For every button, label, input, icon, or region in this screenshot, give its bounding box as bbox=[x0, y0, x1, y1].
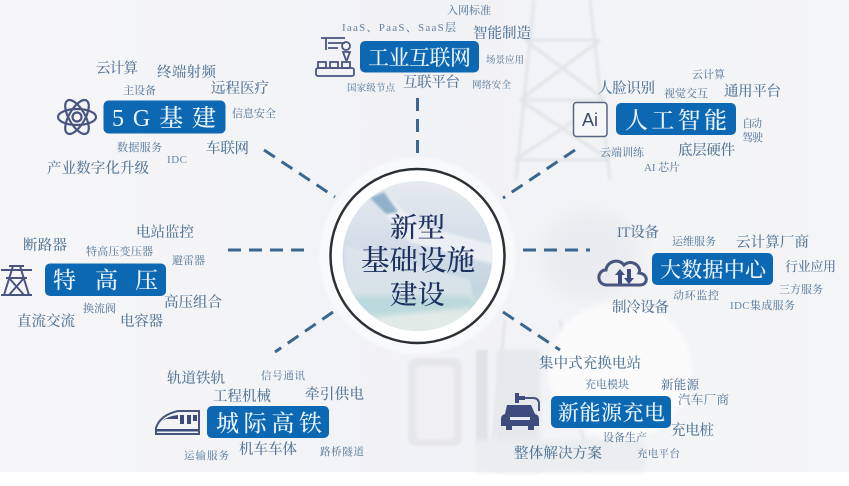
工业互联网 terms: IaaS、PaaS、SaaS层 bbox=[342, 21, 457, 34]
panel: 大数据中心 bbox=[599, 224, 836, 316]
城际高铁 terms bbox=[167, 369, 364, 462]
icon: Ai box: Ai bbox=[582, 110, 598, 130]
5G terms: 云计算 bbox=[96, 60, 138, 77]
panel: 人工智能 bbox=[574, 67, 782, 174]
新能源充电 terms: 整体解决方案 bbox=[514, 444, 602, 462]
新能源充电 terms bbox=[514, 354, 729, 462]
人工智能 terms: 驾驶 bbox=[742, 130, 763, 144]
大数据中心 label: 大数据中心 bbox=[660, 258, 768, 282]
城际高铁 terms: 机车车体 bbox=[239, 441, 298, 458]
工业互联网 terms: 网络安全 bbox=[472, 79, 511, 91]
dashed connectors bbox=[228, 98, 590, 352]
新能源充电 terms: 汽车厂商 bbox=[678, 392, 729, 407]
5G terms: 数据服务 bbox=[117, 140, 162, 154]
icon: cloud bbox=[599, 261, 646, 285]
5G label: 5 G 基 建 bbox=[112, 105, 216, 132]
新能源充电 pill bbox=[551, 396, 671, 428]
特高压 terms: 特高压变压器 bbox=[86, 244, 153, 258]
center title: 新型 bbox=[390, 213, 445, 243]
工业互联网 label: 工业互联网 bbox=[368, 46, 471, 70]
工业互联网 terms: 国家级节点 bbox=[347, 82, 395, 94]
人工智能 terms: 云端训练 bbox=[600, 145, 645, 159]
城际高铁 pill bbox=[207, 406, 329, 438]
人工智能 terms: AI 芯片 bbox=[644, 160, 680, 174]
circle photo: airplane wing bbox=[340, 180, 496, 335]
新能源充电 terms: 新能源 bbox=[661, 377, 699, 392]
特高压 terms bbox=[17, 223, 222, 330]
5G terms: IDC bbox=[167, 154, 187, 166]
panel: 城际高铁 bbox=[155, 369, 364, 462]
人工智能 terms: 通用平台 bbox=[724, 83, 782, 100]
城际高铁 terms: 牵引供电 bbox=[305, 385, 364, 403]
城际高铁 terms: 轨道铁轨 bbox=[167, 369, 226, 387]
人工智能 pill bbox=[616, 103, 736, 135]
5G terms: 信息安全 bbox=[232, 106, 276, 120]
特高压 terms: 断路器 bbox=[23, 237, 68, 254]
大数据中心 terms: IDC集成服务 bbox=[730, 298, 795, 312]
人工智能 terms bbox=[598, 67, 782, 174]
特高压 terms: 直流交流 bbox=[17, 313, 76, 330]
工业互联网 terms bbox=[342, 3, 532, 94]
特高压 terms: 电容器 bbox=[120, 312, 164, 330]
center title: 建设 bbox=[390, 280, 445, 310]
特高压 label: 高 bbox=[95, 268, 118, 293]
新能源充电 terms: 设备生产 bbox=[603, 430, 647, 444]
特高压 terms: 高压组合 bbox=[164, 294, 222, 311]
5G terms: 远程医疗 bbox=[211, 80, 270, 97]
人工智能 terms: 视觉交互 bbox=[664, 86, 708, 100]
5G pill bbox=[104, 100, 226, 134]
panel: 5G bbox=[47, 60, 276, 177]
新能源充电 terms: 充电平台 bbox=[637, 447, 680, 460]
5G terms: 产业数字化升级 bbox=[47, 159, 150, 177]
工业互联网 terms: 入网标准 bbox=[447, 3, 491, 17]
5G terms: 主设备 bbox=[123, 83, 156, 97]
center title: 基础设施 bbox=[361, 245, 475, 277]
新能源充电 terms: 充电桩 bbox=[671, 421, 714, 439]
5G terms: 终端射频 bbox=[157, 63, 216, 81]
icon: transmission tower bbox=[1, 266, 32, 295]
城际高铁 terms: 路桥隧道 bbox=[320, 445, 364, 458]
城际高铁 label: 城际高铁 bbox=[216, 411, 322, 436]
icon: robot arm and conveyor bbox=[316, 38, 354, 76]
特高压 label: 压 bbox=[135, 268, 158, 293]
城际高铁 terms: 信号通讯 bbox=[261, 369, 306, 382]
人工智能 terms: 底层硬件 bbox=[678, 141, 736, 159]
icon: Ai box bbox=[574, 102, 607, 136]
icon: charging car bbox=[501, 393, 539, 430]
central circle bbox=[329, 161, 506, 344]
大数据中心 terms: 制冷设备 bbox=[612, 298, 670, 316]
panel: 工业互联网 bbox=[316, 3, 532, 94]
大数据中心 terms: 行业应用 bbox=[785, 259, 836, 274]
工业互联网 terms: 智能制造 bbox=[473, 24, 532, 42]
center title bbox=[361, 213, 475, 310]
大数据中心 terms: 运维服务 bbox=[672, 234, 716, 248]
工业互联网 terms: 互联平台 bbox=[403, 74, 460, 91]
panel: 新能源充电 bbox=[501, 354, 729, 462]
5G terms: 车联网 bbox=[206, 140, 249, 157]
特高压 terms: 换流阀 bbox=[83, 301, 116, 315]
人工智能 terms: 自动 bbox=[742, 116, 762, 130]
新能源充电 terms: 集中式充换电站 bbox=[539, 354, 641, 372]
人工智能 label: 人工智能 bbox=[625, 108, 727, 133]
新能源充电 terms: 充电模块 bbox=[585, 377, 629, 391]
人工智能 terms: 云计算 bbox=[692, 67, 725, 81]
大数据中心 pill bbox=[652, 253, 773, 285]
特高压 terms: 电站监控 bbox=[136, 223, 194, 241]
城际高铁 terms: 工程机械 bbox=[213, 387, 272, 405]
特高压 pill bbox=[45, 264, 166, 296]
大数据中心 terms bbox=[612, 224, 836, 316]
特高压 label: 特 bbox=[53, 268, 76, 293]
icon: train bbox=[155, 411, 199, 434]
icon: atom bbox=[58, 97, 96, 137]
人工智能 terms: 人脸识别 bbox=[598, 80, 655, 97]
5G terms bbox=[47, 60, 276, 177]
工业互联网 pill bbox=[360, 41, 479, 72]
大数据中心 terms: 云计算厂商 bbox=[736, 233, 809, 251]
新能源充电 label: 新能源充电 bbox=[558, 401, 665, 425]
特高压 terms: 避雷器 bbox=[172, 253, 205, 267]
panel: 特高压 bbox=[1, 223, 222, 330]
特高压 label bbox=[53, 268, 158, 293]
工业互联网 terms: 场景应用 bbox=[486, 54, 524, 66]
大数据中心 terms: 三方服务 bbox=[779, 282, 823, 296]
大数据中心 terms: 动环监控 bbox=[673, 288, 719, 302]
大数据中心 terms: IT设备 bbox=[617, 224, 660, 241]
城际高铁 terms: 运输服务 bbox=[184, 449, 230, 462]
